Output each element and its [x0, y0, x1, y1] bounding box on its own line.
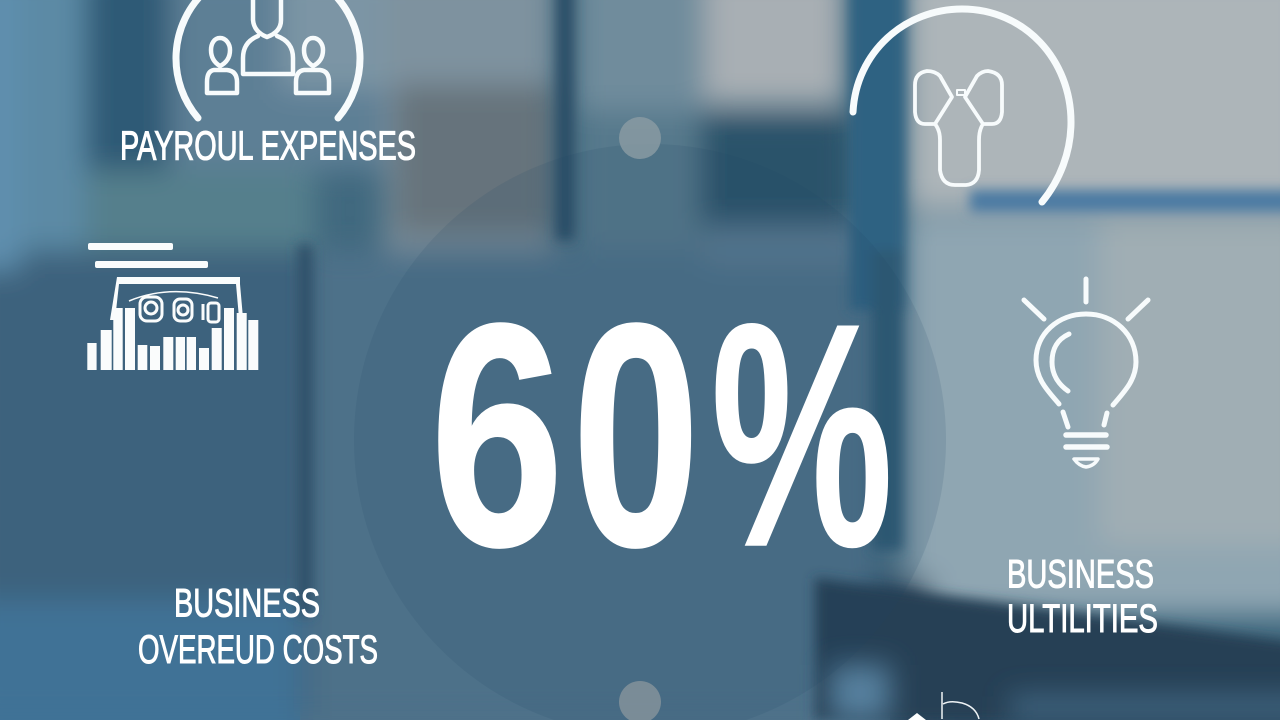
rays: [1024, 279, 1148, 319]
neck: [1063, 412, 1107, 427]
highlight: [1052, 334, 1069, 391]
large arc: [853, 9, 1071, 202]
header lines: [88, 243, 173, 250]
right person: [296, 38, 329, 93]
monitor frame: [110, 277, 243, 320]
tip: [1074, 459, 1098, 467]
big percentage: [430, 258, 893, 613]
right lobe: [965, 71, 1002, 124]
translucent central circle: [354, 144, 946, 720]
monitor glyphs: [129, 292, 219, 322]
heading: payroll expenses: PAYROUL EXPENSES: [120, 122, 416, 168]
icon ring arc: [176, 0, 360, 118]
bottom dot: [619, 681, 661, 720]
label: business overhead costs: [138, 582, 378, 672]
icon: payroll people in arc: [176, 0, 360, 118]
stem: [935, 124, 983, 185]
left person: [207, 38, 237, 93]
line 1: BUSINESS: [1007, 552, 1154, 596]
link: [957, 90, 965, 95]
big percentage: %: [711, 258, 893, 613]
top dot: [619, 117, 661, 159]
label: business utilities: [1007, 552, 1158, 641]
icon: partial bottom icon: [908, 692, 979, 720]
icon: light bulb: [1024, 279, 1148, 467]
bulb outline: [1036, 314, 1136, 405]
left lobe: [915, 71, 952, 124]
line 1: BUSINESS: [174, 582, 320, 626]
base lines: [1066, 435, 1107, 447]
big percentage: 0: [572, 258, 700, 613]
line 2: ULTILITIES: [1007, 597, 1158, 641]
icon: overhead bar chart: [87, 243, 258, 370]
line 2: OVEREUD COSTS: [138, 628, 378, 672]
big percentage: 6: [430, 258, 564, 613]
icon: right arc with outline symbol: [853, 9, 1071, 202]
bars: [87, 308, 258, 370]
center person: [243, 0, 293, 74]
